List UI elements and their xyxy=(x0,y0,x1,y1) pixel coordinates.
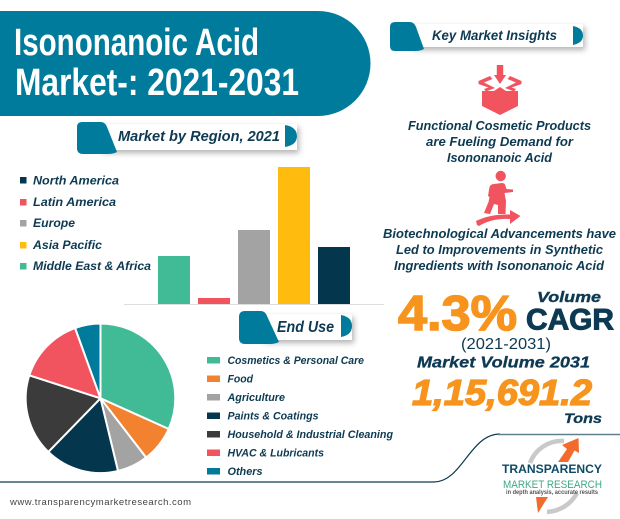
footer divider curve xyxy=(0,434,620,482)
heading: market by region xyxy=(77,122,297,154)
logo: transparency market research: in depth analysis, accurate results xyxy=(506,490,599,496)
stat: 4.3% volume CAGR: CAGR xyxy=(526,304,614,336)
legend: end use xyxy=(207,355,393,478)
stat: market volume 2031 xyxy=(412,354,602,426)
legend: regions xyxy=(20,174,151,273)
heading: end use: End Use xyxy=(277,319,334,336)
title banner xyxy=(0,11,371,116)
text: biotechnological advancements: Led to Improvements in Synthetic xyxy=(396,242,604,257)
stat: 4.3% volume CAGR: 4.3% xyxy=(398,287,517,341)
heading: market by region: Market by Region, 2021 xyxy=(118,129,280,145)
text: biotechnological advancements: Ingredients with Isononanoic Acid xyxy=(394,258,605,273)
stat: market volume 2031: 1,15,691.2 xyxy=(412,372,592,413)
text: functional cosmetic products: Functional Cosmetic Products xyxy=(408,118,591,133)
title banner: Market-: 2021-2031 xyxy=(15,62,299,104)
legend: regions: Latin America xyxy=(33,195,116,209)
text: biotechnological advancements xyxy=(383,226,616,273)
legend: end use: Cosmetics & Personal Care xyxy=(228,355,364,367)
stat: 4.3% volume CAGR: (2021-2031) xyxy=(461,336,551,353)
pie chart: end use xyxy=(26,324,175,473)
bar chart: market by region xyxy=(124,167,384,305)
heading: key market insights xyxy=(390,22,583,51)
heading: key market insights: Key Market Insights xyxy=(432,27,557,43)
legend: end use: Food xyxy=(228,374,253,386)
text: biotechnological advancements: Biotechnological Advancements have xyxy=(383,226,616,241)
legend: end use: Agriculture xyxy=(227,392,285,404)
icon: running person on arrow xyxy=(476,171,520,226)
stat: 4.3% volume CAGR: Volume xyxy=(537,289,601,306)
icon: open box with arrow xyxy=(478,65,522,115)
website url: www.transparencymarketresearch.com xyxy=(9,497,191,508)
text: functional cosmetic products: Isononanoic Acid xyxy=(447,150,553,165)
legend: regions: Middle East & Africa xyxy=(33,259,151,273)
legend: regions: Asia Pacific xyxy=(32,238,102,252)
stat: 4.3% volume CAGR xyxy=(398,287,614,353)
logo: transparency market research xyxy=(502,438,602,513)
stat: market volume 2031: Market Volume 2031 xyxy=(417,354,590,372)
stat: market volume 2031: Tons xyxy=(564,410,602,426)
legend: end use: Paints & Coatings xyxy=(228,410,318,422)
logo: transparency market research: TRANSPARENCY xyxy=(502,462,602,476)
title banner: Isononanoic Acid xyxy=(14,22,259,64)
text: functional cosmetic products xyxy=(408,118,591,165)
legend: end use: Household & Industrial Cleaning xyxy=(228,429,393,441)
legend: end use: Others xyxy=(228,466,262,478)
logo: transparency market research: MARKET RESEARCH xyxy=(503,479,602,491)
text: functional cosmetic products: are Fueling Demand for xyxy=(426,134,574,149)
legend: regions: Europe xyxy=(33,216,75,230)
heading: end use xyxy=(239,311,352,344)
legend: end use: HVAC & Lubricants xyxy=(228,448,324,460)
legend: regions: North America xyxy=(33,174,119,188)
